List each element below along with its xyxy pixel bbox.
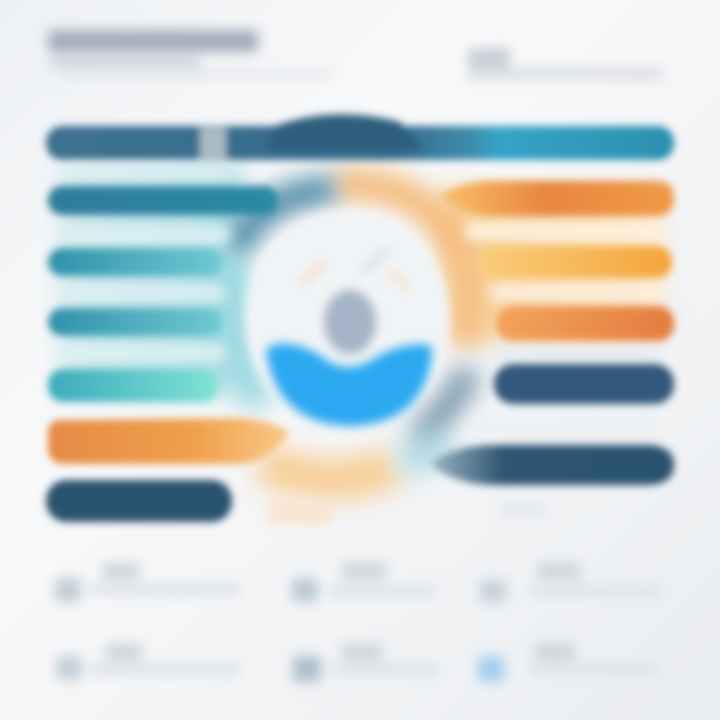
top banner bar <box>46 114 674 162</box>
left bar 3 <box>48 308 223 336</box>
colour wash behind right column <box>440 190 660 340</box>
left bar 5 orange <box>48 418 290 464</box>
colour wash behind left column <box>62 165 242 395</box>
left bar 6 navy <box>46 480 232 522</box>
legend item 6 <box>478 644 660 682</box>
header: secondary text block placeholder <box>468 48 663 80</box>
faint chart lines <box>300 250 410 290</box>
legend item 2 <box>292 563 435 602</box>
legend item 3 <box>480 563 660 602</box>
footer label under the centre <box>268 500 548 524</box>
right column bars <box>430 181 674 485</box>
left bar 2 <box>48 248 223 276</box>
left column bars <box>46 167 290 522</box>
right bar 1 <box>440 181 674 216</box>
legend item 4 <box>56 644 240 680</box>
left bar 1 <box>48 186 278 215</box>
bottom legend row 2 <box>56 644 660 682</box>
right bar 2 <box>480 246 672 278</box>
header: title block placeholder <box>48 30 330 78</box>
legend item 5 <box>293 644 437 682</box>
blue ring around centre <box>230 190 470 462</box>
right bar 4 <box>494 364 674 404</box>
central circle diagram <box>246 210 450 430</box>
right bar 5 <box>430 445 674 485</box>
central figure <box>324 290 376 354</box>
bottom legend row 1 <box>55 563 660 602</box>
right pale separators <box>465 222 660 437</box>
right bar 3 <box>496 306 674 341</box>
left pale separators <box>60 167 230 361</box>
blue bowl <box>266 344 432 426</box>
left bar 4 <box>48 369 218 402</box>
legend item 1 <box>55 563 240 602</box>
orange ring around centre <box>262 184 468 479</box>
circle body <box>246 210 450 430</box>
